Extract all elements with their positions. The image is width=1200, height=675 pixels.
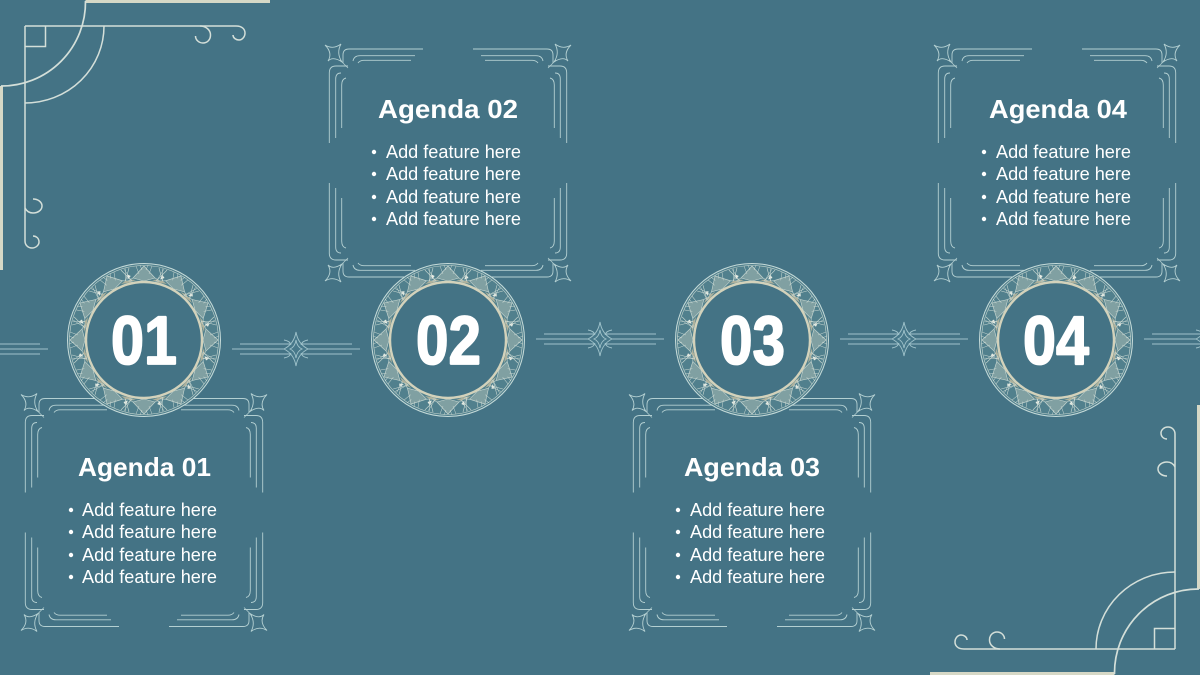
feature list: agenda 03: Add feature here (690, 545, 825, 565)
connector: 03 to 04 (840, 322, 968, 356)
heading: agenda 02: Agenda 02 (378, 94, 518, 124)
feature list: agenda 02: Add feature here (386, 142, 521, 162)
feature list: agenda 01: Add feature here (82, 545, 217, 565)
feature list: agenda 03: Add feature here (690, 567, 825, 587)
text block: agenda 03 (676, 452, 825, 587)
connector: 02 to 03 (536, 322, 664, 356)
feature list: agenda 03: Add feature here (690, 522, 825, 542)
heading: agenda 04: Agenda 04 (989, 94, 1128, 124)
number 03: 03 (720, 302, 785, 379)
mandala ring 03 (676, 264, 828, 416)
heading: agenda 01: Agenda 01 (78, 452, 211, 482)
frame: agenda 01 (21, 394, 267, 632)
badge 03 (676, 264, 828, 416)
feature list: agenda 03: Add feature here (690, 500, 825, 520)
connector: right edge (1144, 322, 1200, 356)
feature list: agenda 03 (676, 500, 825, 587)
feature list: agenda 04: Add feature here (996, 142, 1131, 162)
number 02: 02 (416, 302, 481, 379)
number 01: 01 (111, 302, 177, 379)
corner ornament: bottom right (930, 405, 1199, 674)
mandala ring 01 (68, 264, 220, 416)
connector: 01 to 02 (232, 332, 360, 366)
mandala ring 04 (980, 264, 1132, 416)
feature list: agenda 01: Add feature here (82, 500, 217, 520)
badge 02 (372, 264, 524, 416)
feature list: agenda 01 (69, 500, 217, 587)
feature list: agenda 04: Add feature here (996, 209, 1131, 229)
text block: agenda 01 (69, 452, 217, 587)
feature list: agenda 04: Add feature here (996, 187, 1131, 207)
feature list: agenda 01: Add feature here (82, 522, 217, 542)
frame: agenda 03 (629, 394, 875, 632)
badge 04 (980, 264, 1132, 416)
heading: agenda 03: Agenda 03 (684, 452, 820, 482)
text block: agenda 04 (982, 94, 1131, 229)
feature list: agenda 02: Add feature here (386, 187, 521, 207)
frame: agenda 02 (325, 44, 571, 282)
feature list: agenda 02: Add feature here (386, 209, 521, 229)
badge 01 (68, 264, 220, 416)
text block: agenda 02 (372, 94, 521, 229)
feature list: agenda 01: Add feature here (82, 567, 217, 587)
feature list: agenda 02: Add feature here (386, 164, 521, 184)
corner ornament: top left (1, 1, 270, 270)
feature list: agenda 04 (982, 142, 1131, 229)
number 04: 04 (1023, 302, 1089, 379)
feature list: agenda 04: Add feature here (996, 164, 1131, 184)
frame: agenda 04 (934, 44, 1180, 282)
feature list: agenda 02 (372, 142, 521, 229)
mandala ring 02 (372, 264, 524, 416)
connector: left edge (0, 332, 48, 366)
